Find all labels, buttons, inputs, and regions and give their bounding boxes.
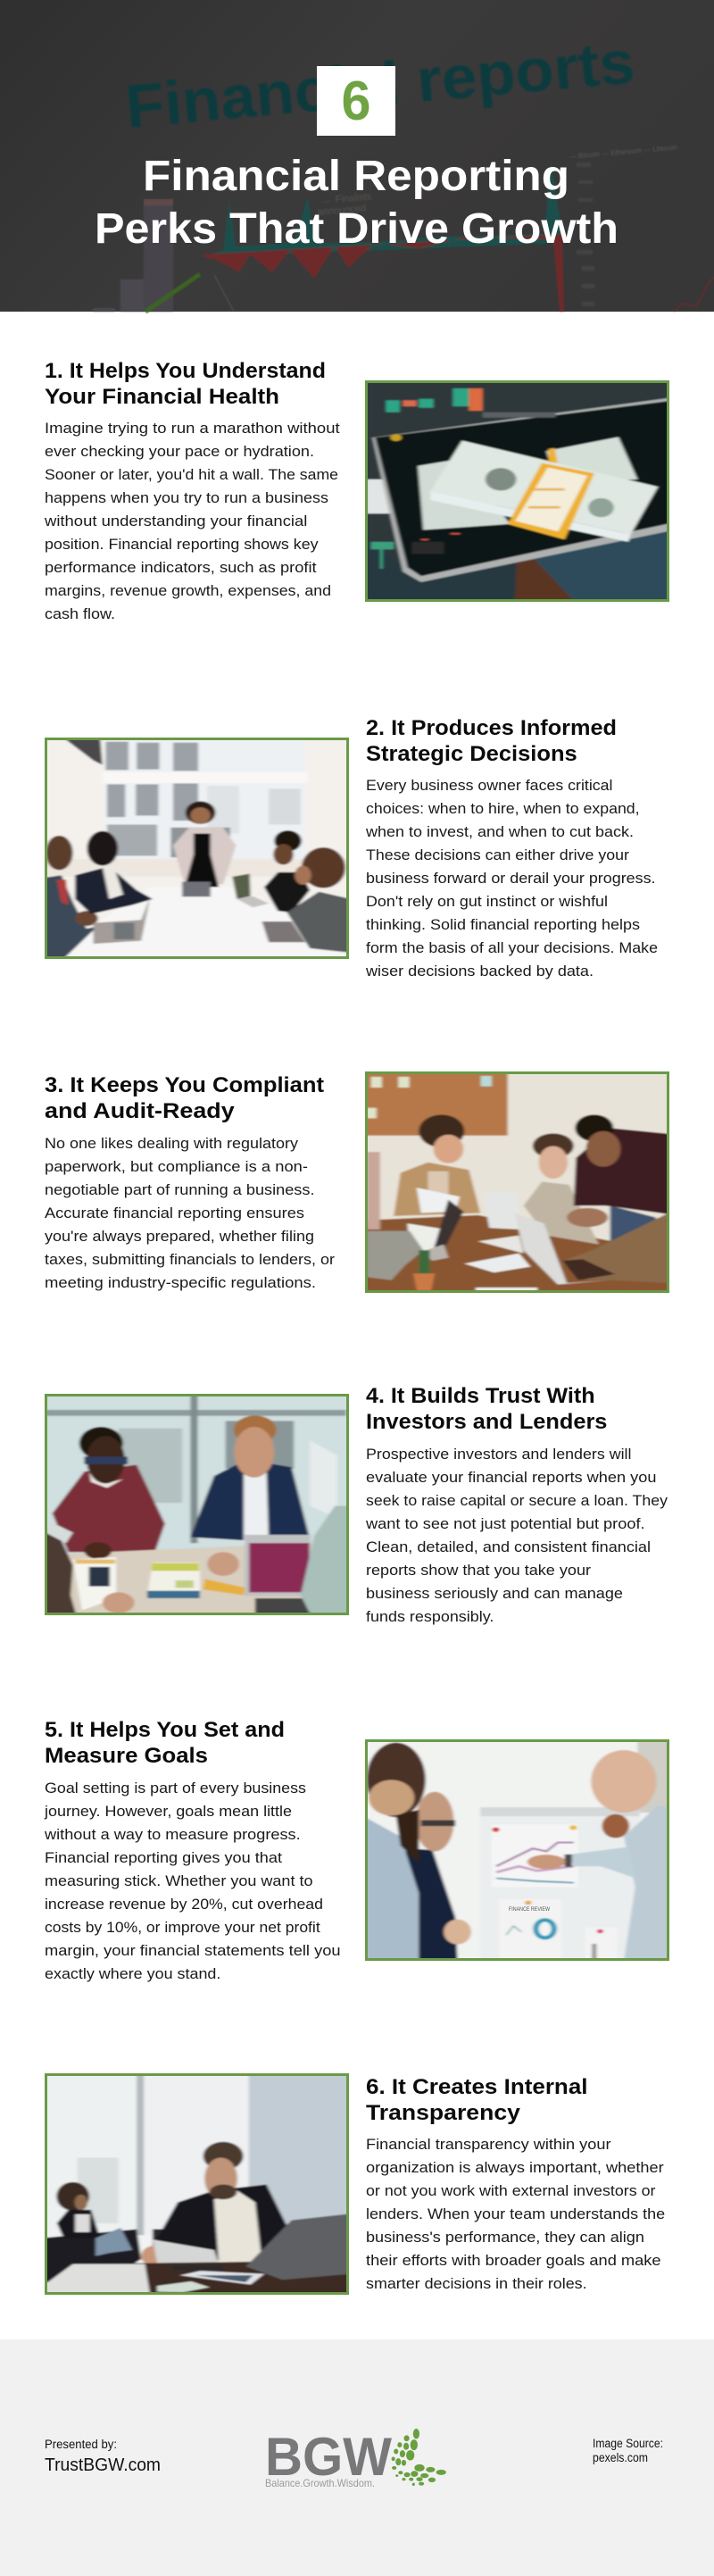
body text 4: Clean, detailed, and consistent financial	[366, 1539, 651, 1555]
body text 4: evaluate your financial reports when you	[366, 1470, 657, 1486]
body text 5: measuring stick. Whether you want to	[45, 1873, 312, 1889]
body text 3: paperwork, but compliance is a non-	[45, 1159, 308, 1175]
body text 2: Don't rely on gut instinct or wishful	[366, 894, 608, 910]
body text 2: business forward or derail your progress.	[366, 871, 655, 887]
body text 1: ever checking your pace or hydration.	[45, 444, 314, 460]
header banner	[0, 0, 714, 312]
photo: cash on a tablet	[355, 375, 678, 607]
image source: pexels.com	[593, 2451, 648, 2464]
background photo: financial reports chart: Financial reports	[123, 28, 637, 141]
body text 3: taxes, submitting financials to lenders, or	[45, 1252, 336, 1268]
body text 6: smarter decisions in their roles.	[366, 2276, 587, 2292]
body text 1: position. Financial reporting shows key	[45, 537, 319, 553]
body text 3: No one likes dealing with regulatory	[45, 1136, 299, 1152]
title: Perks That Drive Growth	[95, 205, 619, 253]
body text 6: Financial transparency within your	[366, 2137, 611, 2153]
heading 6: 6. It Creates Internal	[366, 2075, 587, 2099]
heading 3: 3. It Keeps You Compliant	[45, 1073, 324, 1097]
body text 2: wiser decisions backed by data.	[365, 963, 594, 980]
background photo: financial reports chart	[93, 28, 714, 312]
body text 2: These decisions can either drive your	[366, 847, 630, 863]
heading 5	[45, 1718, 285, 1768]
body text 4: business seriously and can manage	[366, 1586, 623, 1602]
body text 5: Goal setting is part of every business	[45, 1780, 306, 1797]
presented by: TrustBGW.com	[45, 2455, 161, 2475]
heading 5: Measure Goals	[45, 1744, 208, 1768]
icon: green leaf of dots	[391, 2429, 446, 2486]
heading 6: Transparency	[366, 2101, 521, 2125]
body text 2: Every business owner faces critical	[366, 778, 612, 794]
body text 2: form the basis of all your decisions. Make	[366, 940, 658, 956]
body text 1	[44, 421, 340, 622]
body text 5: without a way to measure progress.	[44, 1827, 301, 1843]
image source: Image Source:	[593, 2437, 663, 2450]
body text 3: negotiable part of running a business.	[45, 1182, 314, 1198]
background photo: financial reports chart: ← Finalists	[322, 191, 372, 206]
body text 6: organization is always important, whether	[366, 2160, 664, 2176]
presented by	[45, 2438, 161, 2475]
heading 4: Investors and Lenders	[366, 1410, 607, 1434]
panel: section 4	[37, 1384, 668, 1625]
photo: man reading a report at a desk	[37, 2068, 355, 2297]
footer	[0, 2339, 714, 2576]
heading 1: 1. It Helps You Understand	[45, 359, 326, 383]
body text 5: increase revenue by 20%, cut overhead	[45, 1897, 323, 1913]
body text 5: journey. However, goals mean little	[44, 1804, 292, 1820]
body text 4: funds responsibly.	[366, 1609, 494, 1625]
body text 3: you're always prepared, whether filing	[45, 1229, 314, 1245]
body text 6: or not you work with external investors or	[366, 2183, 656, 2199]
body text 5: exactly where you stand.	[45, 1966, 220, 1982]
heading 2: Strategic Decisions	[366, 742, 577, 766]
body text 2: choices: when to hire, when to expand,	[366, 801, 640, 817]
heading 2: 2. It Produces Informed	[366, 716, 617, 740]
body text 4: reports show that you take your	[366, 1563, 592, 1579]
body text 6: business's performance, they can align	[366, 2230, 644, 2246]
logo: BGW: BGW	[265, 2427, 392, 2487]
panel: section 2	[37, 716, 658, 980]
body text 4: seek to raise capital or secure a loan. They	[366, 1493, 668, 1509]
body text 5: costs by 10%, or improve your net profit	[45, 1920, 320, 1936]
body text 3: meeting industry-specific regulations.	[45, 1275, 316, 1291]
body text 2: thinking. Solid financial reporting helps	[366, 917, 640, 933]
body text 5	[44, 1780, 341, 1982]
photo: men studying charts on a whiteboard	[355, 1735, 678, 1964]
body text 1: Sooner or later, you'd hit a wall. The same	[45, 467, 338, 483]
logo: BGW	[265, 2427, 446, 2489]
heading 6	[366, 2075, 587, 2125]
body text 4: Prospective investors and lenders will	[366, 1446, 632, 1463]
body text 6: their efforts with broader goals and make	[366, 2253, 661, 2269]
heading 4	[366, 1384, 607, 1434]
body text 4	[365, 1446, 668, 1625]
body text 3	[45, 1136, 336, 1291]
body text 1: performance indicators, such as profit	[45, 560, 317, 576]
body text 1: cash flow.	[45, 606, 115, 622]
photo: colleagues around a wooden table	[355, 1065, 678, 1298]
number badge: 6	[341, 71, 371, 132]
body text 4: want to see not just potential but proof.	[365, 1516, 645, 1532]
body text 6	[366, 2137, 665, 2292]
text on the photographed chart: FINANCE REVIEW	[509, 1907, 550, 1913]
body text 1: without understanding your financial	[44, 513, 307, 529]
heading 4: 4. It Builds Trust With	[366, 1384, 595, 1408]
photo: team meeting in a bright boardroom	[37, 732, 355, 964]
body text 2	[365, 778, 658, 980]
body text 6: lenders. When your team understands the	[366, 2206, 665, 2222]
title	[95, 153, 619, 253]
heading 2	[366, 716, 617, 766]
body text 1: margins, revenue growth, expenses, and	[45, 583, 331, 599]
body text 5: margin, your financial statements tell you	[45, 1943, 341, 1959]
title: Financial Reporting	[143, 153, 569, 200]
panel: section 3	[45, 1065, 678, 1298]
heading 3	[45, 1073, 324, 1123]
panel: section 1	[44, 359, 678, 622]
heading 1	[45, 359, 326, 409]
heading 1: Your Financial Health	[45, 385, 279, 409]
background photo: financial reports chart: announced	[317, 203, 367, 218]
heading 5: 5. It Helps You Set and	[45, 1718, 285, 1742]
presented by: Presented by:	[45, 2438, 117, 2451]
photo: two men reviewing reports and a laptop	[37, 1389, 355, 1619]
panel: section 6	[37, 2068, 665, 2297]
background photo: financial reports chart: — Bitcoin — Ethereum — Litecoin	[569, 143, 677, 161]
heading 3: and Audit-Ready	[45, 1099, 235, 1123]
image source	[593, 2437, 663, 2464]
body text 2: when to invest, and when to cut back.	[365, 824, 634, 840]
body text 1: happens when you try to run a business	[45, 490, 328, 506]
body text 3: Accurate financial reporting ensures	[45, 1205, 304, 1221]
number badge	[317, 66, 395, 136]
logo: BGW: Balance.Growth.Wisdom.	[265, 2477, 375, 2489]
panel: section 5	[44, 1718, 678, 1982]
body text 1: Imagine trying to run a marathon without	[45, 421, 340, 437]
body text 5: Financial reporting gives you that	[45, 1850, 282, 1866]
